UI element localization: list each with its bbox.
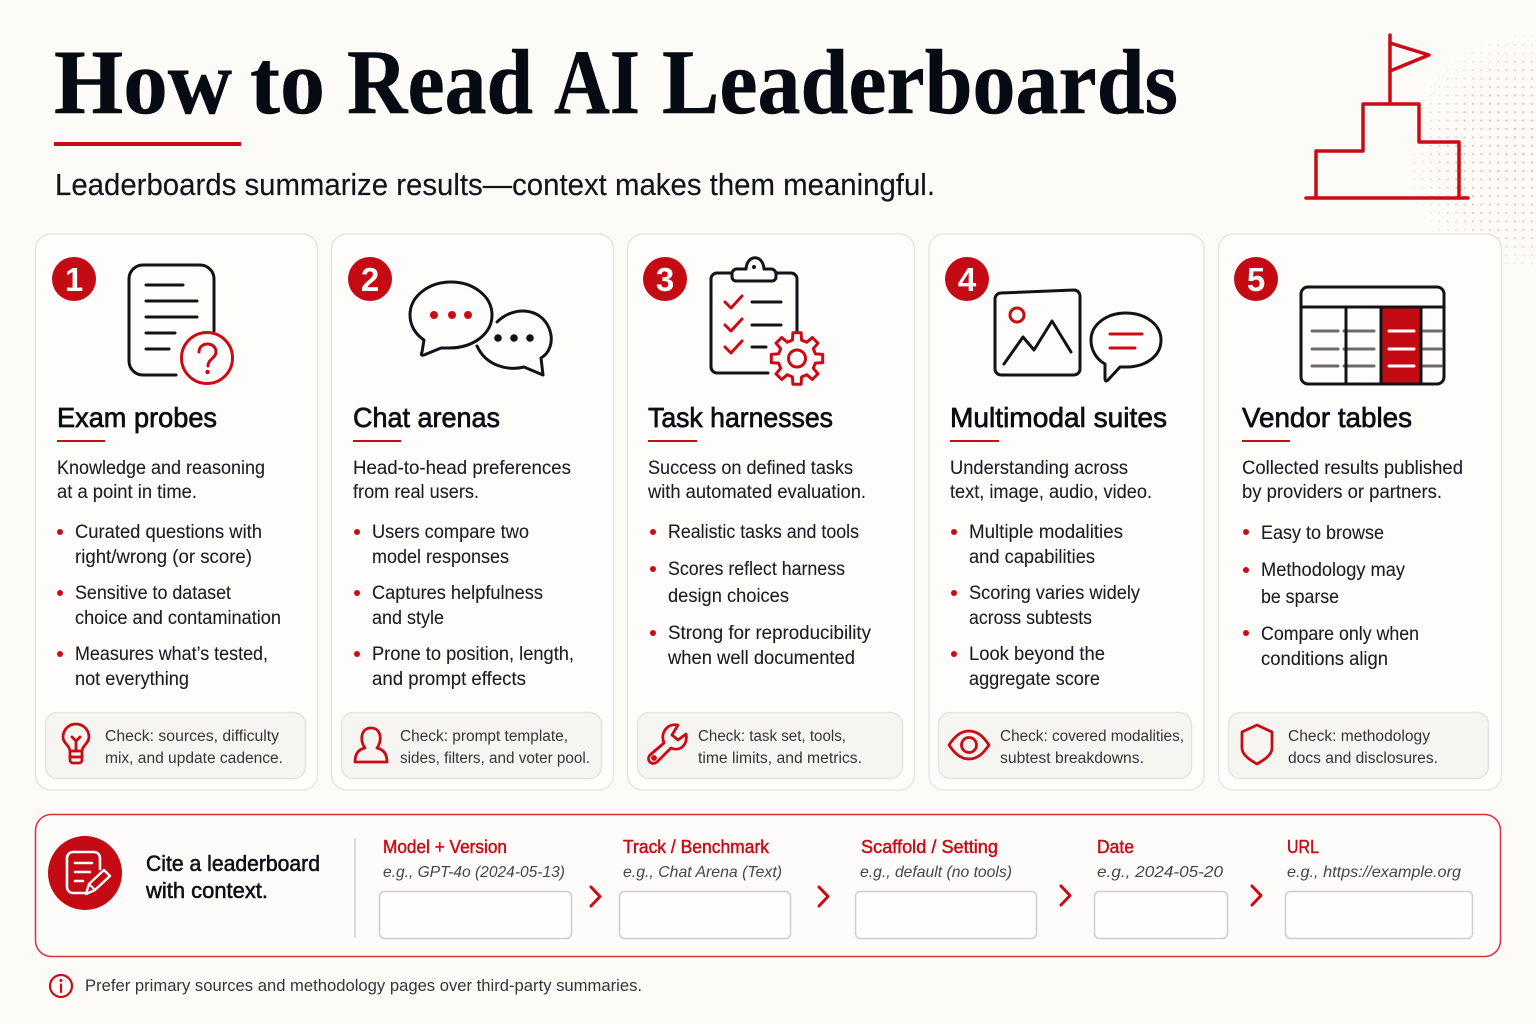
heading rule xyxy=(57,440,105,442)
callout: cite heading: Cite a leaderboard xyxy=(146,851,320,876)
bullet list: Compare only when xyxy=(1261,624,1419,645)
bullet list: Easy to browse xyxy=(1261,523,1384,544)
title: to xyxy=(250,31,325,133)
panel: chat arenas xyxy=(332,234,614,790)
bullet list: and prompt effects xyxy=(372,669,526,690)
badge 4: 4 xyxy=(958,261,977,298)
bullet list: be sparse xyxy=(1261,587,1339,608)
badge 5: 5 xyxy=(1247,261,1265,298)
intro text: Head-to-head preferences xyxy=(353,458,571,479)
field: url: e.g., https://example.org xyxy=(1287,864,1461,881)
badge 2 xyxy=(348,257,392,301)
title: How xyxy=(54,31,232,133)
icon: light bulb xyxy=(63,724,89,763)
bullet list: choice and contamination xyxy=(75,608,281,629)
intro text xyxy=(950,458,1152,503)
icon: table with highlighted column xyxy=(1301,287,1444,384)
bullet list: Captures helpfulness xyxy=(372,583,543,604)
intro text xyxy=(1242,458,1463,503)
bullet list: when well documented xyxy=(667,648,855,669)
heading rule xyxy=(950,440,999,442)
panel: task harnesses xyxy=(628,234,914,790)
bullet list: Multiple modalities xyxy=(969,522,1123,543)
check box xyxy=(938,712,1192,778)
heading: Task harnesses xyxy=(648,402,833,433)
bullet list xyxy=(354,522,574,690)
icon: info xyxy=(50,975,72,997)
icon: wrench xyxy=(649,725,686,763)
bullet list xyxy=(1243,523,1419,670)
field: model + version: e.g., GPT-4o (2024-05-13) xyxy=(383,864,565,881)
check box: Check: task set, tools, xyxy=(698,728,846,745)
field: scaffold / setting xyxy=(856,837,1036,938)
title: Leaderboards xyxy=(662,31,1178,133)
intro text: Understanding across xyxy=(950,458,1128,479)
bullet list: model responses xyxy=(372,547,509,568)
title underline xyxy=(54,142,241,146)
intro text: at a point in time. xyxy=(57,482,197,503)
intro text: with automated evaluation. xyxy=(647,482,866,503)
icon: clipboard with gear xyxy=(711,258,823,384)
arrow xyxy=(1252,886,1261,905)
icon: eye xyxy=(949,731,989,759)
bullet list: Measures what’s tested, xyxy=(75,644,268,665)
field: scaffold / setting: Scaffold / Setting xyxy=(861,837,998,857)
heading: Multimodal suites xyxy=(950,402,1167,433)
badge 5 xyxy=(1234,257,1278,301)
panel: vendor tables xyxy=(1218,234,1502,790)
intro text: by providers or partners. xyxy=(1242,482,1442,503)
bullet list xyxy=(650,522,871,669)
check box: Check: sources, difficulty xyxy=(105,728,279,745)
intro text: Success on defined tasks xyxy=(648,458,853,479)
bullet list: aggregate score xyxy=(969,669,1100,690)
heading rule xyxy=(353,440,401,442)
bullet list: Strong for reproducibility xyxy=(668,623,871,644)
icon: image and caption bubble xyxy=(995,290,1161,381)
heading rule xyxy=(648,440,697,442)
bullet list: not everything xyxy=(75,669,189,690)
bullet list: Scores reflect harness xyxy=(668,559,845,580)
heading: Vendor tables xyxy=(1242,402,1412,433)
bullet list: Sensitive to dataset xyxy=(75,583,232,604)
bullet list: right/wrong (or score) xyxy=(75,547,252,568)
icon: chat bubbles xyxy=(410,282,551,375)
badge 1 xyxy=(52,257,96,301)
check box: sides, filters, and voter pool. xyxy=(400,750,590,767)
check box: Check: prompt template, xyxy=(400,728,568,745)
field: date: e.g., 2024-05-20 xyxy=(1097,864,1223,881)
title xyxy=(54,31,1178,133)
heading: Chat arenas xyxy=(353,402,500,433)
footnote: Prefer primary sources and methodology pages over third-party summaries. xyxy=(85,977,642,995)
check box: subtest breakdowns. xyxy=(1000,750,1144,767)
field: url xyxy=(1286,837,1472,938)
field: model + version xyxy=(380,837,572,938)
bullet list: Look beyond the xyxy=(969,644,1105,665)
bullet list: Methodology may xyxy=(1261,560,1405,581)
bullet list: and style xyxy=(372,608,444,629)
panel: multimodal suites xyxy=(929,234,1204,790)
check box xyxy=(342,712,602,778)
badge 2: 2 xyxy=(361,261,379,298)
field: date: Date xyxy=(1097,837,1134,857)
icon: shield xyxy=(1242,725,1272,764)
panel: exam probes xyxy=(36,234,318,790)
title: Read xyxy=(347,31,533,133)
badge 4 xyxy=(945,257,989,301)
arrow xyxy=(819,887,828,906)
check box: mix, and update cadence. xyxy=(105,750,283,767)
arrow xyxy=(591,887,600,906)
bullet list: Users compare two xyxy=(372,522,529,543)
title: AI xyxy=(554,31,640,133)
field: scaffold / setting: e.g., default (no tools) xyxy=(860,864,1012,881)
check box xyxy=(46,712,306,778)
badge 3: 3 xyxy=(656,261,674,298)
panel: citation strip xyxy=(36,814,1500,956)
intro text xyxy=(353,458,571,503)
intro text: text, image, audio, video. xyxy=(950,482,1152,503)
bullet list xyxy=(57,522,281,690)
check box xyxy=(638,712,902,778)
field: track / benchmark: Track / Benchmark xyxy=(623,837,770,857)
check box xyxy=(1228,712,1488,778)
field: url: URL xyxy=(1287,837,1319,857)
check box: Check: methodology xyxy=(1288,728,1430,745)
field: date xyxy=(1094,837,1228,938)
badge 3 xyxy=(643,257,687,301)
callout: cite heading: with context. xyxy=(145,878,268,903)
field: track / benchmark: e.g., Chat Arena (Text) xyxy=(623,864,782,881)
field: model + version: Model + Version xyxy=(383,837,507,857)
bullet list: conditions align xyxy=(1261,649,1388,670)
check box: docs and disclosures. xyxy=(1288,750,1438,767)
bullet list xyxy=(951,522,1140,690)
intro text: Knowledge and reasoning xyxy=(57,458,265,479)
check box: time limits, and metrics. xyxy=(698,750,862,767)
heading: Exam probes xyxy=(57,402,217,433)
bullet list: Realistic tasks and tools xyxy=(668,522,859,543)
callout: cite heading xyxy=(145,851,320,903)
field: track / benchmark xyxy=(620,837,790,938)
intro text: Collected results published xyxy=(1242,458,1463,479)
heading rule xyxy=(1242,440,1290,442)
intro text: from real users. xyxy=(353,482,479,503)
bullet list: Prone to position, length, xyxy=(372,644,574,665)
icon: podium with flag xyxy=(1306,35,1468,198)
arrow xyxy=(1061,886,1070,905)
bullet list: Scoring varies widely xyxy=(969,583,1140,604)
icon: person xyxy=(355,728,387,762)
badge 1: 1 xyxy=(65,261,83,298)
bullet list: across subtests xyxy=(969,608,1092,629)
icon: document with question mark xyxy=(129,265,232,384)
subtitle: Leaderboards summarize results—context makes them meaningful. xyxy=(55,167,935,202)
intro text xyxy=(57,458,265,503)
bullet list: Curated questions with xyxy=(75,522,262,543)
bullet list: design choices xyxy=(668,586,789,607)
bullet list: and capabilities xyxy=(969,547,1095,568)
icon: document and pencil badge xyxy=(48,836,122,910)
intro text xyxy=(647,458,866,503)
check box: Check: covered modalities, xyxy=(1000,728,1184,745)
